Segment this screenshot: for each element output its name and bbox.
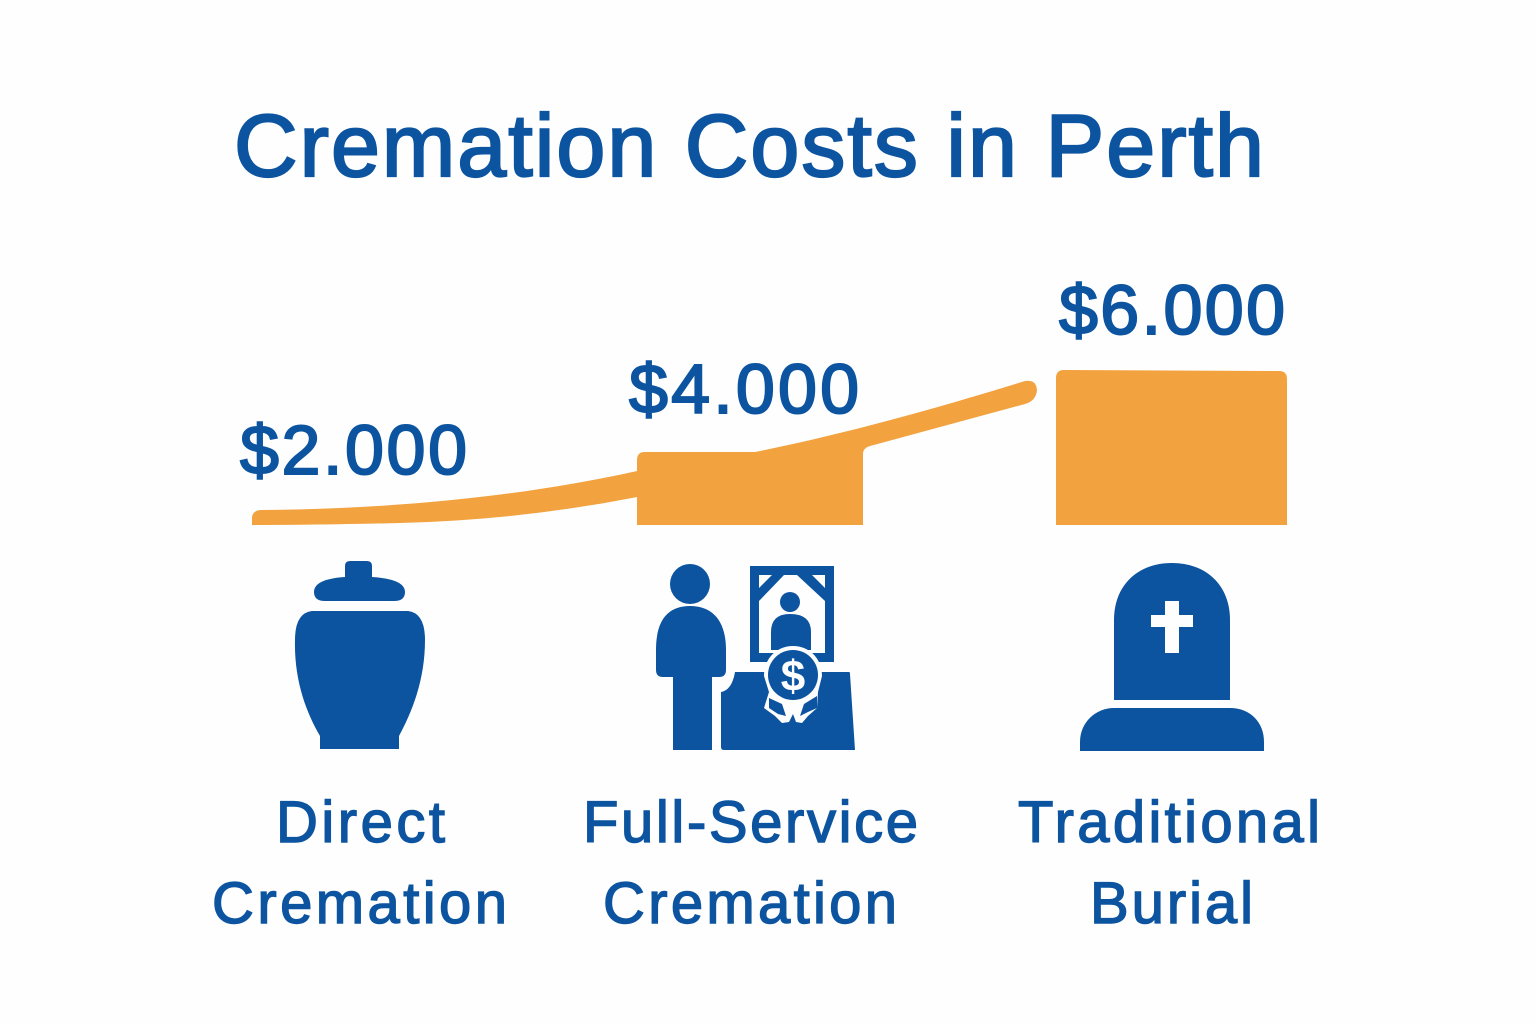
- label: traditional burial: [1018, 790, 1320, 936]
- label: full-service cremation: [583, 790, 918, 936]
- icon: urn: [295, 561, 425, 749]
- label: full-service cremation: Full-Service: [583, 790, 918, 855]
- chart: cost comparison: [240, 271, 1287, 525]
- icon: framed portrait: [750, 566, 834, 662]
- label: full-service cremation: Cremation: [603, 871, 897, 936]
- label: direct cremation: [212, 790, 507, 936]
- value: direct cremation: $2.000: [240, 411, 467, 489]
- bar: full-service cremation: [637, 381, 1037, 525]
- value: traditional burial: $6.000: [1059, 271, 1285, 349]
- icon: desk: [721, 672, 855, 750]
- bar: traditional burial: [1056, 370, 1287, 525]
- label: traditional burial: Burial: [1090, 871, 1253, 936]
- icon: hands holding coin: [764, 646, 822, 723]
- icon: full-service scene: [656, 564, 855, 750]
- label: direct cremation: Cremation: [212, 871, 507, 936]
- value: full-service cremation: $4.000: [629, 350, 859, 428]
- icon: hands holding coin: $: [781, 652, 805, 701]
- label: traditional burial: Traditional: [1018, 790, 1320, 855]
- label: direct cremation: Direct: [276, 790, 445, 855]
- icon: standing person: [656, 564, 726, 750]
- icon: gravestone: [1080, 563, 1264, 751]
- bar: direct cremation connector: [252, 471, 637, 525]
- title: Cremation Costs in Perth: [234, 96, 1264, 195]
